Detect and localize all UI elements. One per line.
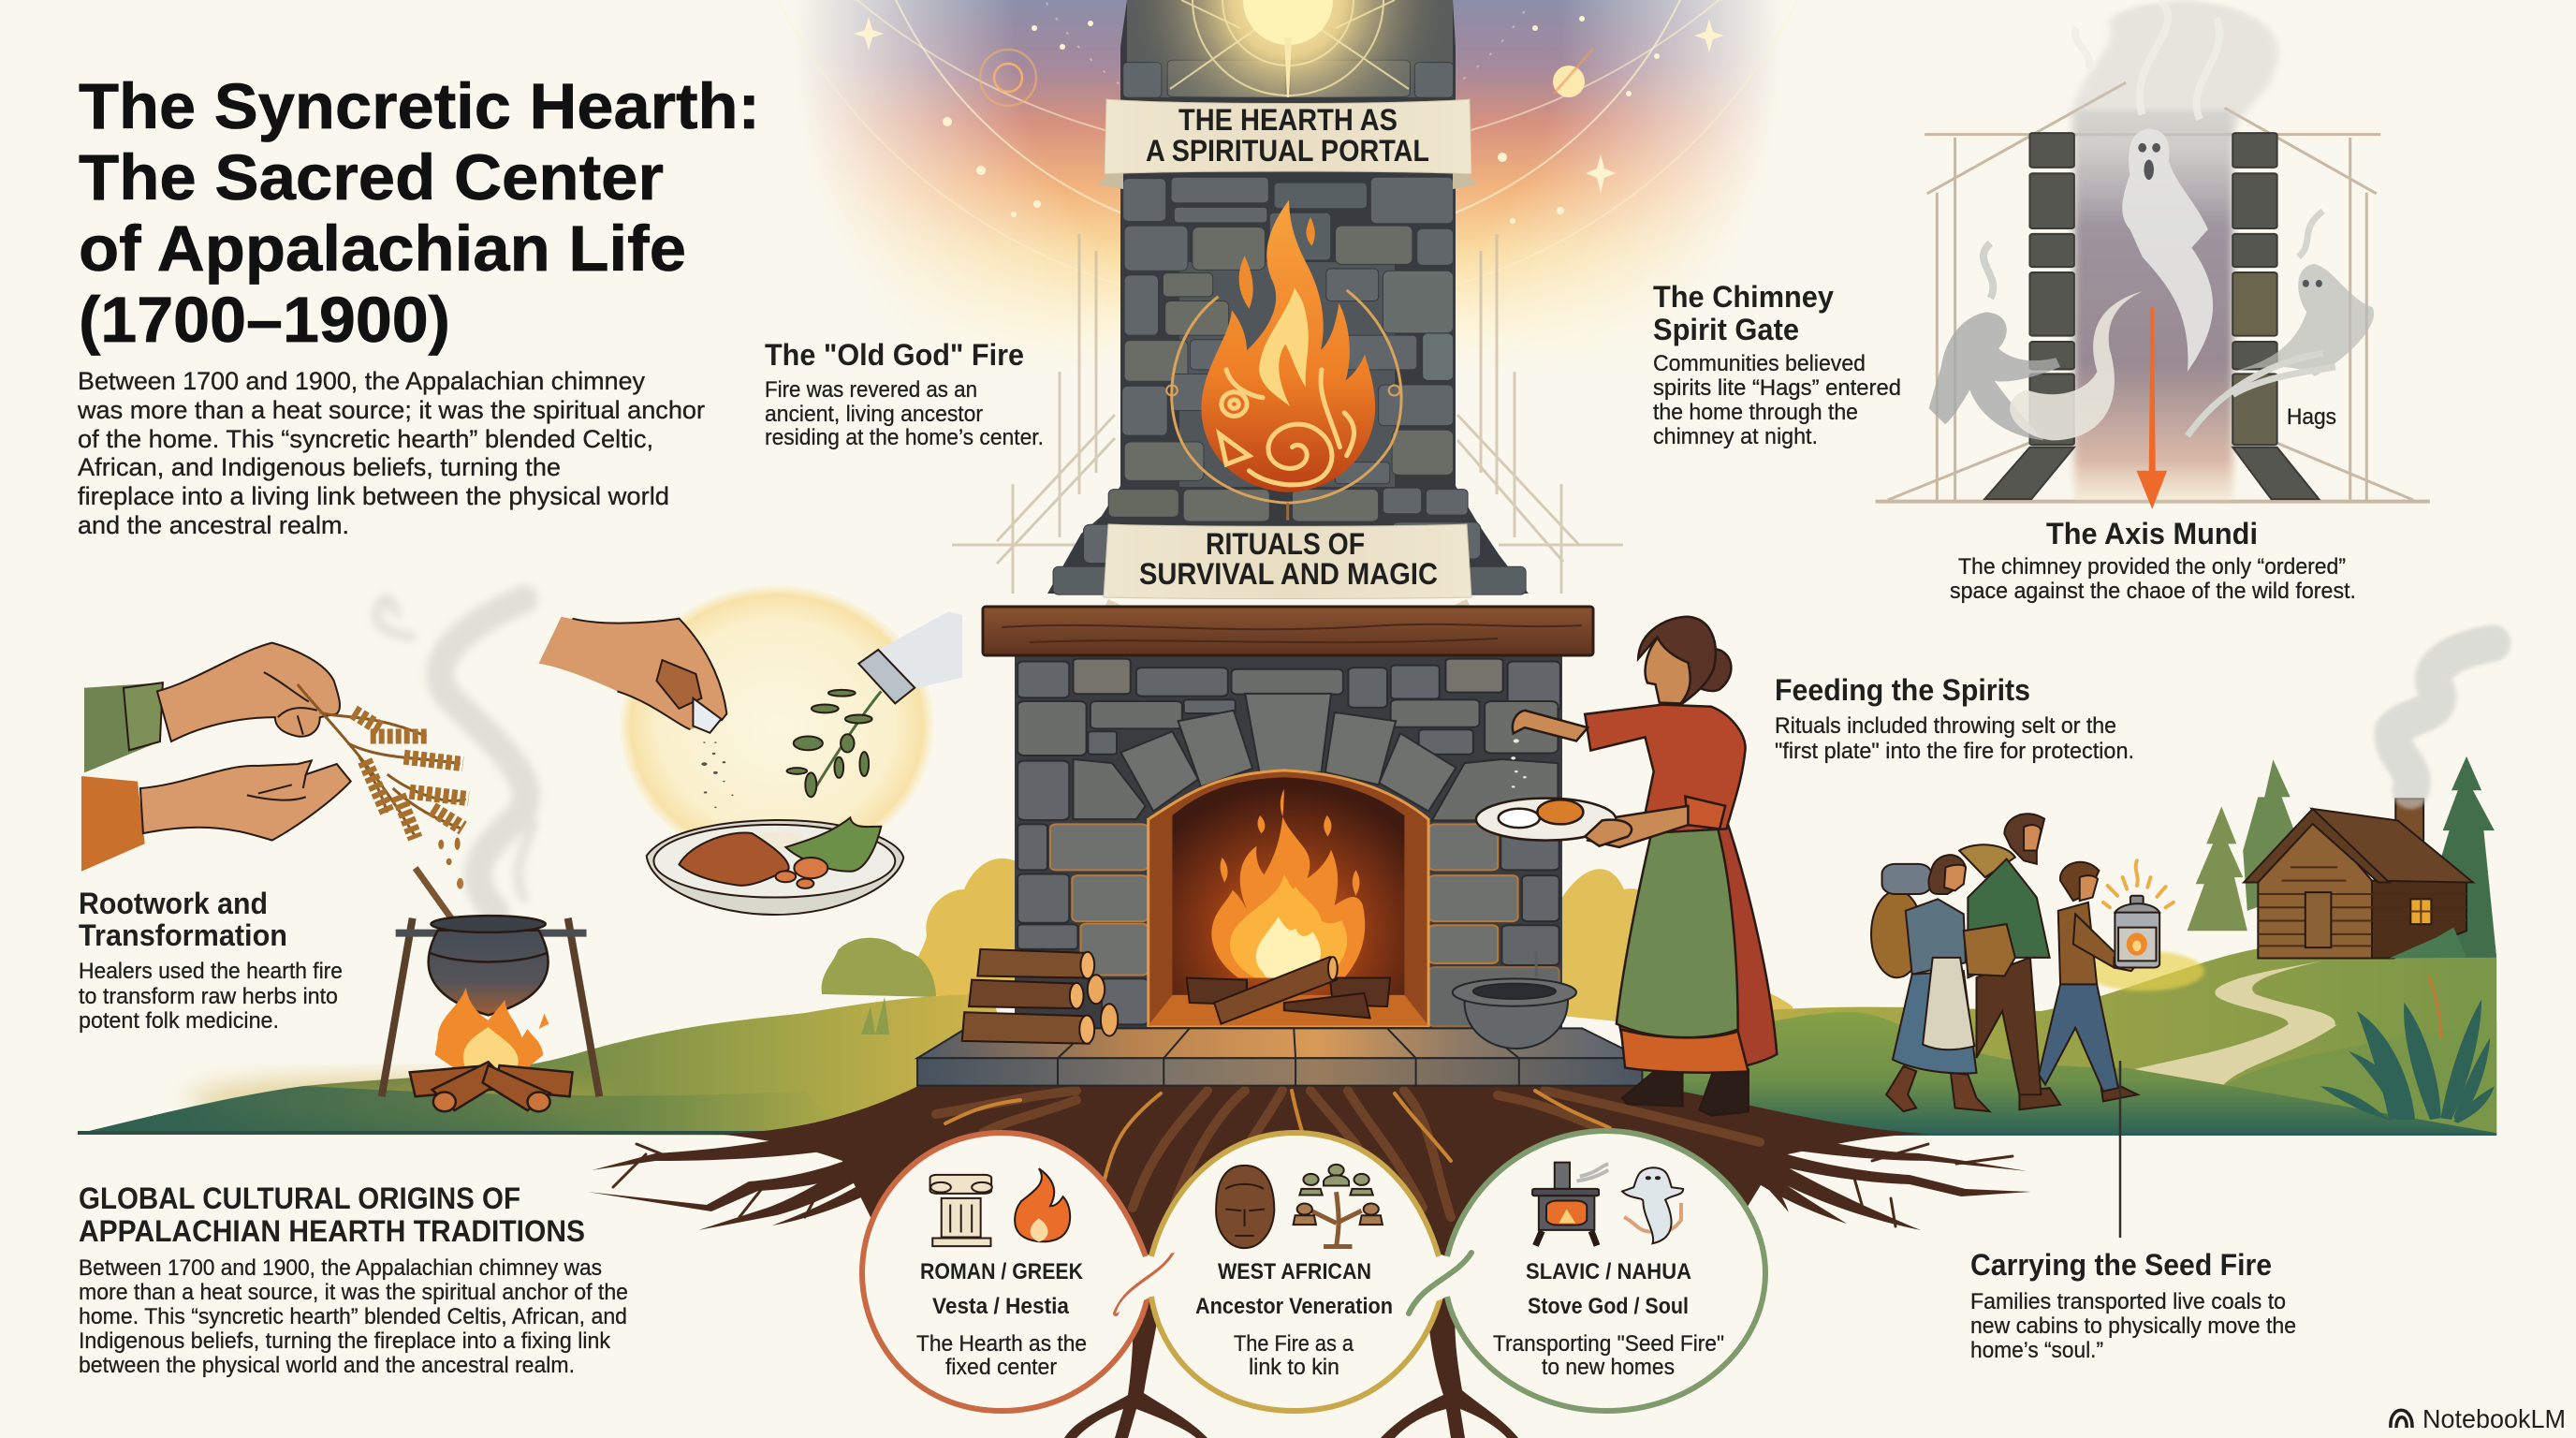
campfire logs [410, 1062, 573, 1111]
section: global cultural origins: Indigenous beliefs, turning the fireplace into a fixing link [79, 1328, 611, 1354]
labels: roman greek: Vesta / Hestia [932, 1294, 1070, 1319]
labels: slavic nahua: Stove God / Soul [1528, 1294, 1689, 1319]
callout: old god fire: The "Old God" Fire [765, 338, 1024, 372]
man traveler [1959, 844, 2015, 877]
intro paragraph: fireplace into a living link between the physical world [78, 482, 669, 510]
labels: west african: WEST AFRICAN [1218, 1259, 1371, 1284]
section: global cultural origins: Between 1700 and 1900, the Appalachian chimney was [79, 1255, 602, 1281]
callout: chimney spirit gate [1653, 280, 1901, 449]
labels: slavic nahua: SLAVIC / NAHUA [1526, 1259, 1691, 1284]
iron pot on hearth [1453, 951, 1576, 1049]
icon: ionic column [930, 1175, 992, 1246]
callout: axis mundi [1950, 517, 2356, 604]
banner: rituals of survival and magic [1097, 524, 1478, 623]
intro paragraph: was more than a heat source; it was the spiritual anchor [77, 396, 705, 424]
labels: slavic nahua: to new homes [1542, 1355, 1675, 1380]
callout: chimney spirit gate: Communities believed [1653, 351, 1866, 376]
emblem main flame [1201, 200, 1375, 492]
banner: the hearth as a spiritual portal [1097, 99, 1478, 189]
hearth fire logs [1187, 957, 1390, 1024]
smoke haze between walls [2074, 110, 2232, 500]
labels: slavic nahua [1493, 1259, 1724, 1380]
boy traveler [2101, 1086, 2138, 1101]
labels: roman greek: fixed center [945, 1355, 1057, 1380]
callout: rootwork and transformation: Transformation [79, 918, 287, 952]
callout: carrying the seed fire: Carrying the Seed Fire [1970, 1248, 2272, 1282]
chimney stones [1053, 60, 1526, 594]
labels: west african: link to kin [1249, 1355, 1339, 1380]
falling herbs [811, 691, 881, 795]
callout: feeding the spirits: Feeding the Spirits [1775, 673, 2030, 707]
section: global cultural origins: GLOBAL CULTURAL ORIGINS OF [79, 1181, 520, 1215]
faint construction lines around chimney [952, 234, 1623, 594]
woman feeding the fire [1476, 617, 1777, 1115]
banner: rituals of survival and magic: RITUALS OF [1206, 527, 1365, 561]
herb hands [81, 643, 469, 889]
log cabin [2395, 799, 2423, 844]
trees behind cabin [2188, 756, 2496, 958]
labels: slavic nahua: Transporting "Seed Fire" [1493, 1331, 1724, 1357]
callout: feeding the spirits [1775, 673, 2134, 764]
chimney spirit gate diagram [1875, 0, 2430, 509]
fireplace stones [1017, 659, 1560, 1026]
callout: rootwork and transformation: to transform raw herbs into [79, 984, 338, 1009]
plate of food [647, 820, 903, 915]
house frame lines [1875, 82, 2430, 502]
callout: chimney spirit gate: Spirit Gate [1653, 313, 1799, 346]
notebooklm logo: NotebookLM [2422, 1404, 2566, 1433]
section: global cultural origins [79, 1181, 628, 1378]
icon: ancestor tree [1294, 1165, 1383, 1246]
cauldron over campfire [382, 868, 599, 1111]
title: The Sacred Center [79, 141, 664, 213]
stone wall columns [1984, 133, 2319, 499]
intro paragraph: and the ancestral realm. [78, 511, 349, 539]
middle hill right [2224, 1021, 2496, 1135]
woman traveler [1871, 890, 1923, 977]
callout: rootwork and transformation: Rootwork and [79, 887, 268, 920]
background bushes and left hill [78, 858, 1030, 1136]
back hill [1641, 947, 2496, 1135]
leader line to seed fire callout [2119, 1061, 2121, 1238]
callout: rootwork and transformation: potent folk medicine. [79, 1008, 279, 1034]
callout: axis mundi: The Axis Mundi [2046, 517, 2258, 550]
callout: rootwork and transformation [79, 887, 343, 1034]
old god flame emblem [1166, 200, 1401, 521]
callout: old god fire: Fire was revered as an [765, 377, 977, 403]
labels: roman greek [916, 1259, 1087, 1380]
shaker bottle [878, 611, 962, 688]
labels: roman greek: ROMAN / GREEK [920, 1259, 1084, 1284]
callout: feeding the spirits: Rituals included throwing selt or the [1775, 713, 2116, 739]
fireplace body [917, 607, 1642, 1086]
label: hags: Hags [2287, 404, 2336, 430]
labels: roman greek: The Hearth as the [916, 1331, 1087, 1357]
section: global cultural origins: more than a heat source, it was the spiritual anchor of the [79, 1280, 628, 1305]
icon: ghost soul [1622, 1167, 1683, 1243]
icon: flame [1015, 1168, 1070, 1241]
culture circles [862, 1131, 1765, 1411]
stacked logs [962, 949, 1118, 1044]
circle: west african [1116, 1133, 1471, 1411]
callout: chimney spirit gate: chimney at night. [1653, 424, 1818, 449]
callout: old god fire: residing at the home’s center. [765, 425, 1044, 450]
intro paragraph: Between 1700 and 1900, the Appalachian chimney [78, 367, 645, 395]
circle: slavic nahua [1409, 1131, 1765, 1411]
orange axis arrow [2137, 307, 2167, 509]
plate offering [1476, 799, 1616, 841]
banner: the hearth as a spiritual portal: A SPIRITUAL PORTAL [1146, 134, 1429, 168]
glowing sun at top of chimney [1127, 0, 1453, 97]
labels: west african [1195, 1259, 1393, 1380]
intro paragraph: African, and Indigenous beliefs, turning the [78, 453, 561, 481]
callout: axis mundi: The chimney provided the only “ordered” [1958, 554, 2346, 580]
cabin smoke [2393, 643, 2493, 790]
section: global cultural origins: between the physical world and the ancestral realm. [79, 1353, 575, 1378]
roots beneath the hearth [587, 1085, 2031, 1438]
callout: carrying the seed fire: home’s “soul.” [1970, 1338, 2103, 1363]
intro paragraph: of the home. This “syncretic hearth” blended Celtic, [78, 425, 653, 453]
labels: west african: Ancestor Veneration [1195, 1294, 1393, 1319]
callout: carrying the seed fire [1970, 1248, 2296, 1363]
seed fire lantern [2115, 911, 2159, 968]
title: (1700–1900) [79, 284, 450, 356]
front hill [1641, 1012, 2496, 1135]
section: global cultural origins: APPALACHIAN HEARTH TRADITIONS [79, 1214, 585, 1248]
callout: chimney spirit gate: The Chimney [1653, 280, 1834, 314]
steam over cauldron [376, 598, 534, 913]
callout: feeding the spirits: "first plate" into the fire for protection. [1775, 739, 2134, 764]
family carrying the seed fire [1871, 643, 2496, 1123]
callout: carrying the seed fire: new cabins to physically move the [1970, 1313, 2296, 1339]
left hag [1929, 243, 2143, 440]
callout: axis mundi: space against the chaoe of the wild forest. [1950, 579, 2356, 604]
callout: rootwork and transformation: Healers used the hearth fire [79, 959, 343, 984]
hand sprinkling salt [539, 617, 726, 729]
salt and plate offering illustration [539, 585, 962, 915]
central ghost [2122, 128, 2213, 372]
callout: old god fire [765, 338, 1044, 450]
hearth fire flame [1211, 788, 1365, 978]
winding path [2131, 961, 2337, 1085]
callout: chimney spirit gate: the home through the [1653, 400, 1858, 425]
hearth slab [917, 1028, 1642, 1086]
title [79, 70, 760, 356]
title: of Appalachian Life [79, 213, 686, 285]
callout: carrying the seed fire: Families transported live coals to [1970, 1289, 2286, 1314]
banner: the hearth as a spiritual portal: THE HEARTH AS [1178, 103, 1398, 137]
foreground plant [2320, 999, 2495, 1123]
banner: rituals of survival and magic: SURVIVAL AND MAGIC [1139, 557, 1438, 591]
icon: wood stove [1532, 1163, 1608, 1245]
icon: ancestral mask [1216, 1166, 1274, 1248]
circle: roman greek [862, 1133, 1175, 1411]
intro paragraph [77, 367, 705, 539]
campfire flames [435, 988, 543, 1072]
chimney stack [1047, 0, 1529, 594]
labels: west african: The Fire as a [1234, 1331, 1354, 1357]
title: The Syncretic Hearth: [79, 70, 760, 142]
mantel beam [983, 607, 1593, 655]
right hills, path, bushes [1561, 869, 2496, 1136]
callout: chimney spirit gate: spirits lite “Hags” entered [1653, 375, 1901, 401]
cosmic portal sky [777, 0, 1799, 354]
callout: old god fire: ancient, living ancestor [765, 402, 983, 427]
section: global cultural origins: home. This “syncretic hearth” blended Celtis, African, and [79, 1304, 627, 1329]
right hag [2188, 211, 2374, 436]
herb bundle [298, 684, 469, 839]
firebox opening [1149, 770, 1428, 1026]
